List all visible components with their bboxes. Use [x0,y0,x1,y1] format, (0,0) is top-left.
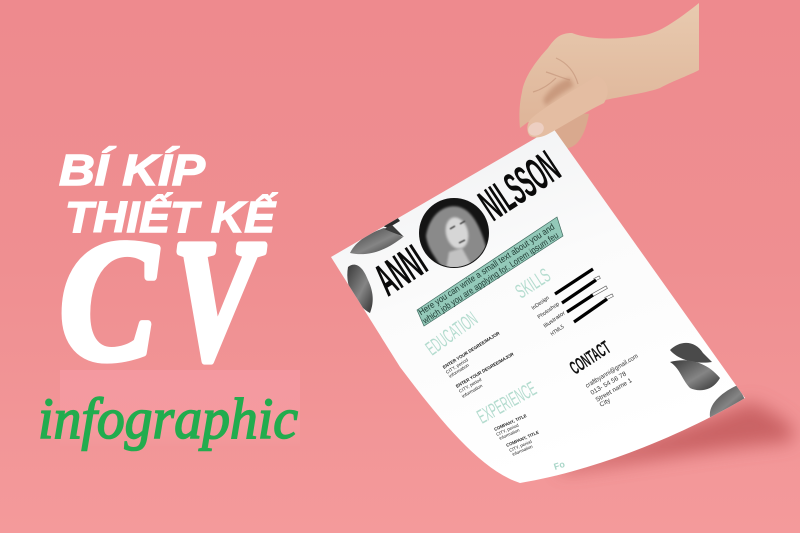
experience heading: EXPERIENCE [474,378,540,428]
experience entries: information [511,444,534,457]
heading: THIẾT KẾ: THIẾT KẾ [65,192,278,242]
education entries [442,330,515,399]
contact section [566,338,639,409]
paper sheet [331,128,745,483]
paper shadow [560,402,794,472]
experience section [474,378,540,457]
footer mark: Fo [553,459,567,472]
thumb [527,76,608,137]
contact heading: CONTACT [566,338,615,379]
experience entries: COMPANY, TITLE [505,430,540,448]
leaves bottom-right [670,343,746,417]
lighter title backdrop [60,370,300,446]
skill bar outlines [591,277,613,299]
name: ANNI: ANNI [365,235,435,305]
finger shadow [543,78,574,106]
experience entries: CITY, period [508,439,533,453]
arm and palm [519,3,699,128]
portrait photo [419,198,490,270]
education entries: ENTER YOUR DEGREE/MAJOR [442,330,501,370]
intro text box: which job you are applying for. Lorem ipsum feu [420,230,560,326]
skill labels [531,295,567,338]
experience entries: information [498,427,521,441]
experience entries: CITY, period [495,422,520,437]
skill labels: HTML5 [550,324,565,338]
CV document [331,128,746,483]
skill labels: InDesign [531,295,551,312]
finger crease [533,58,578,92]
CV document: NILSSON [470,141,569,230]
education entries: information [448,362,470,379]
skills section [512,265,613,338]
contact details: craftbyanni@gmail.com [584,353,639,390]
hand holding the page [519,3,699,138]
skill labels: Photoshop [537,301,561,321]
education entries: CITY, period [445,357,469,375]
education section [422,308,515,399]
heading: infographic: infographic [38,386,298,451]
contact details [584,353,639,409]
heading: CV: V [172,206,265,396]
hand fingers behind the page [550,112,589,152]
thumbnail [526,120,546,138]
leaves top-left [347,217,404,313]
experience entries [493,413,540,457]
education entries: information [461,383,484,399]
contact details: City [598,397,612,409]
heading: CV [60,206,265,396]
skill bars [555,269,607,322]
experience entries: COMPANY, TITLE [493,413,527,432]
skill labels: Illustrator [543,310,567,330]
skills heading: SKILLS [512,265,555,303]
education heading: EDUCATION [422,308,482,360]
contact details: 013- 54 56 78 [590,370,628,397]
contact details: Street name 1 [594,377,634,404]
heading: CV: C [60,206,158,396]
intro text box: Here you can write a small text about you and [417,222,556,317]
education entries: CITY, period [458,377,483,394]
heading: BÍ KÍP: BÍ KÍP [59,145,206,195]
education entries: ENTER YOUR DEGREE/MAJOR [455,351,515,389]
